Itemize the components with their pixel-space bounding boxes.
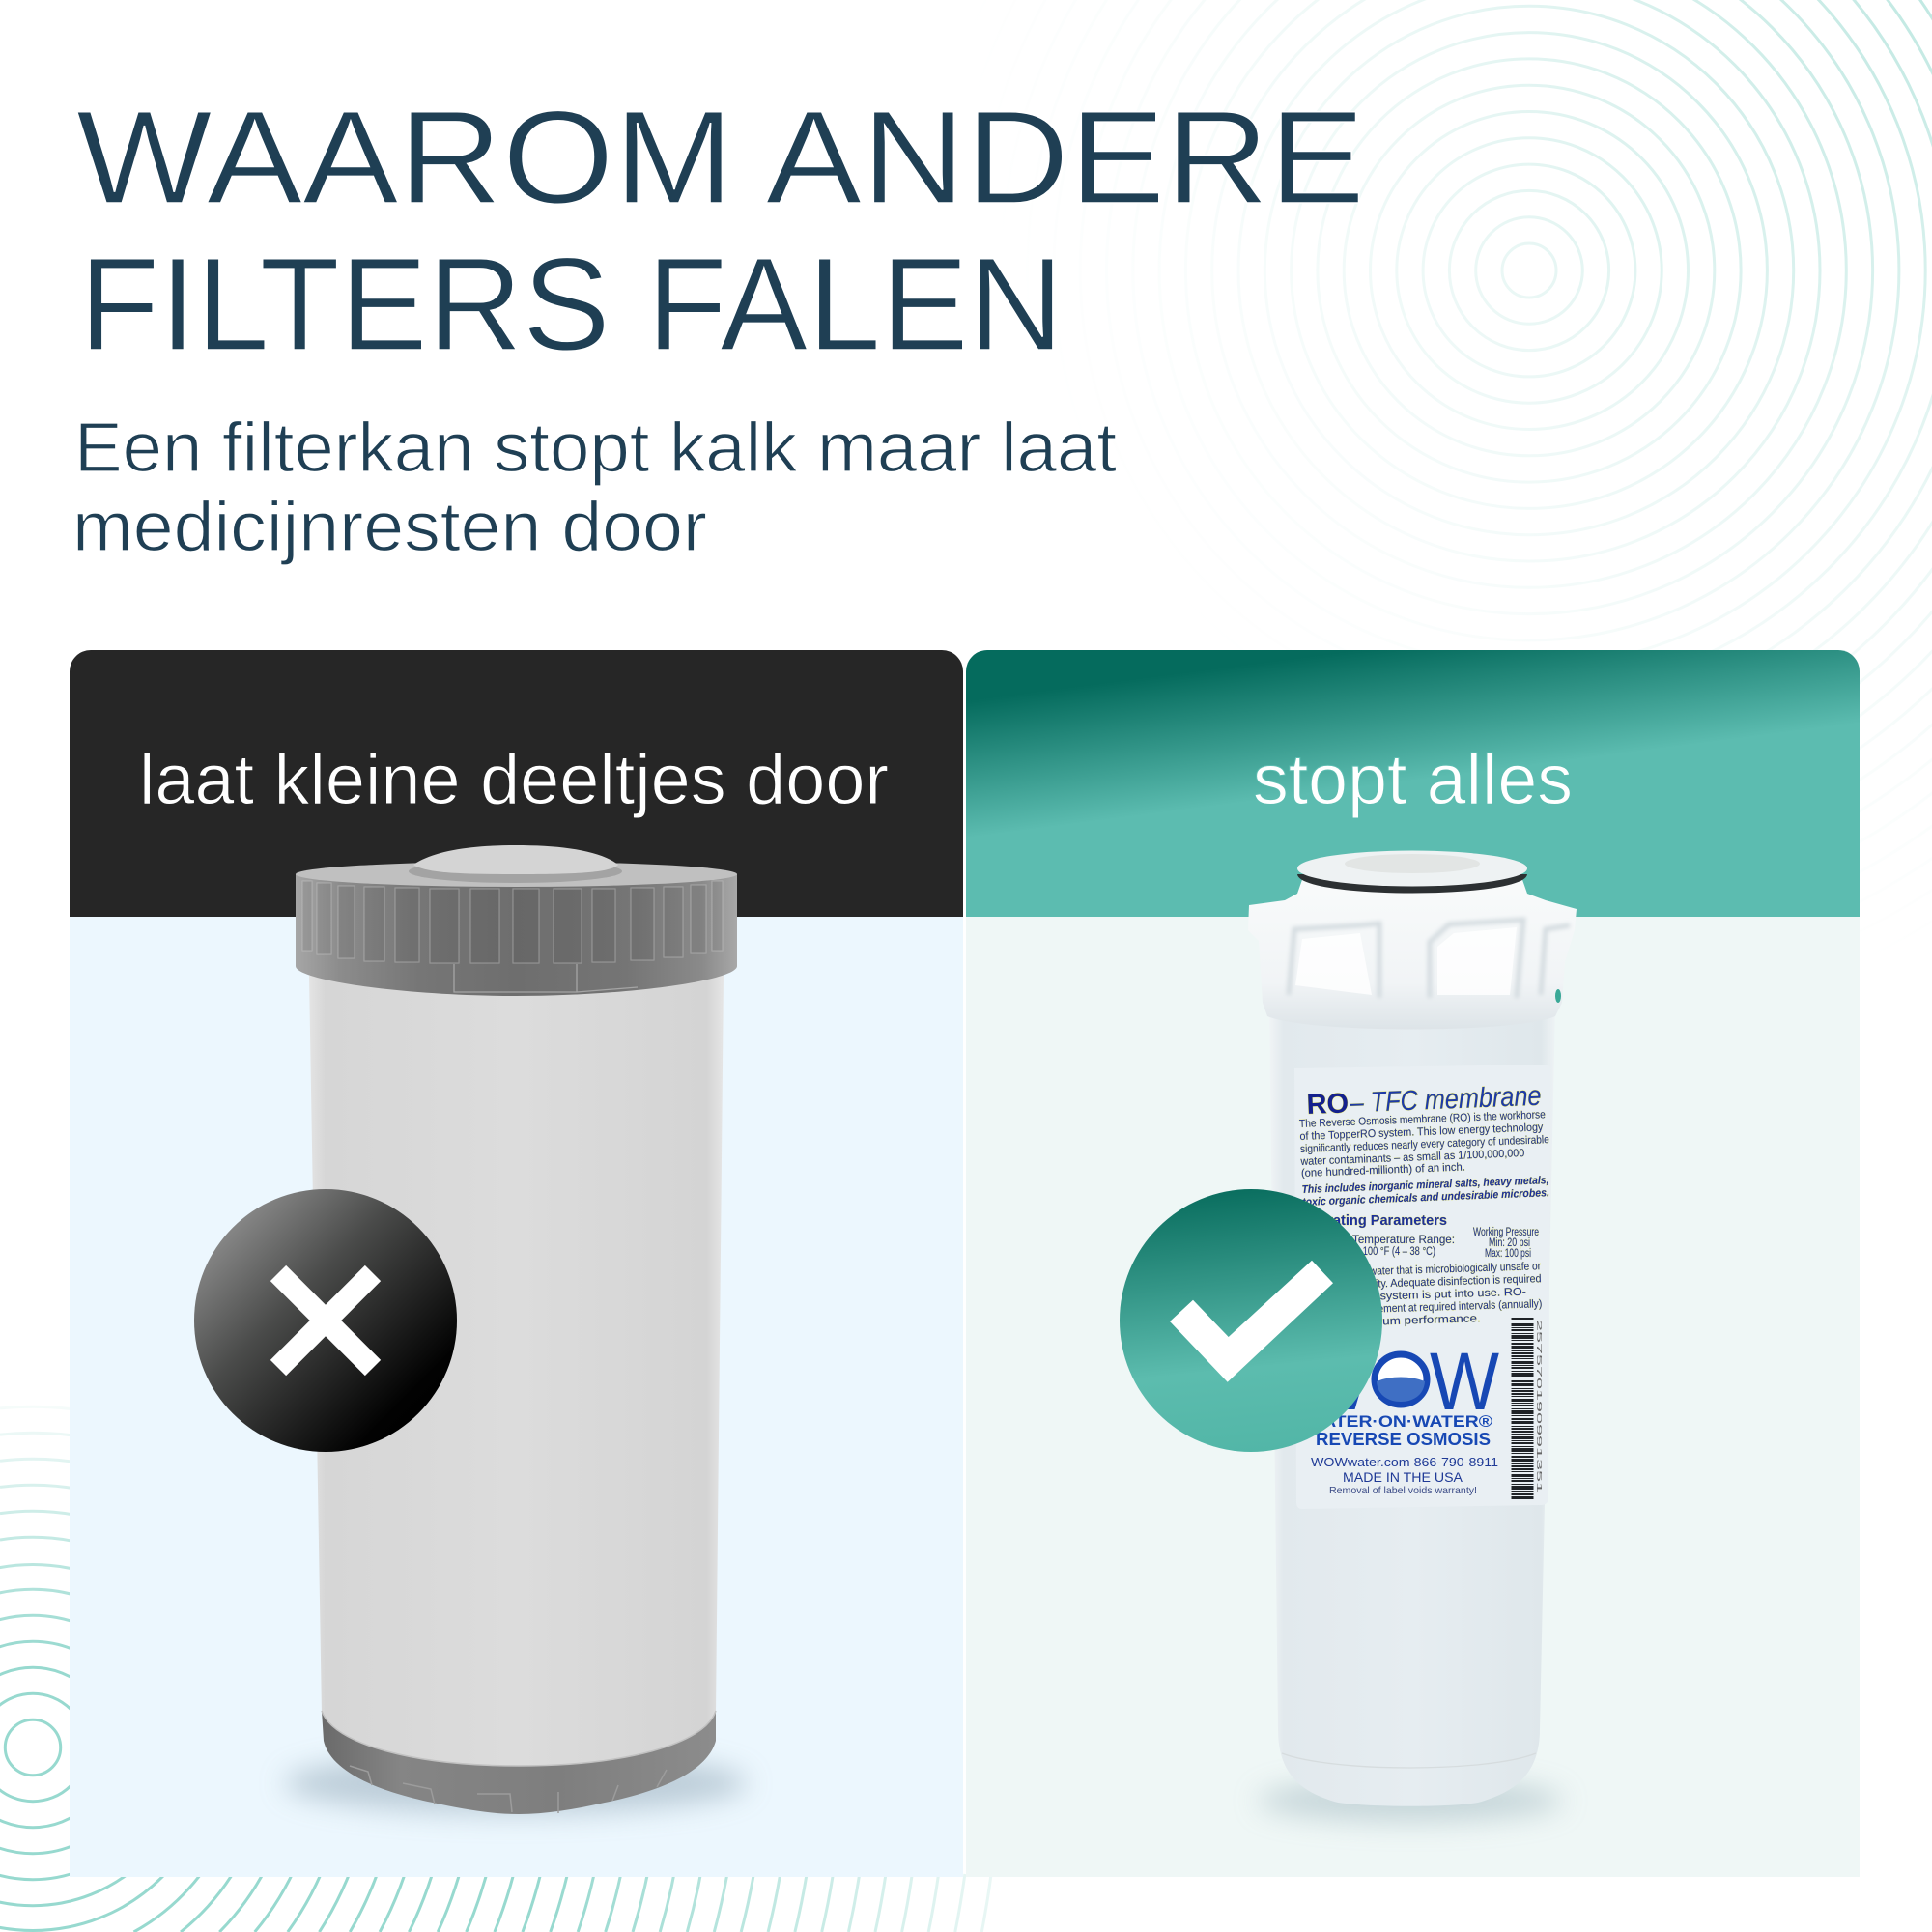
- label heading: RO: [1306, 1088, 1350, 1121]
- product label: [1294, 1065, 1551, 1509]
- left panel background: [70, 917, 963, 1877]
- title: FILTERS FALEN: [79, 231, 1064, 379]
- decorative rings: top right: [737, 0, 1932, 1063]
- label heading: – TFC membrane: [1349, 1081, 1542, 1119]
- label parameters: [1300, 1212, 1539, 1260]
- panel: right, reverse osmosis: [966, 650, 1860, 1877]
- cross badge: [194, 1189, 457, 1452]
- check badge: [1120, 1189, 1382, 1452]
- label parameters: Min: 20 psi: [1489, 1237, 1530, 1249]
- label warning: membrane replacement at required intervals (annually): [1300, 1298, 1543, 1318]
- subtitle: Een filterkan stopt kalk maar laat: [74, 410, 1117, 487]
- WOW logo: W: [1430, 1336, 1499, 1427]
- shadow under right filter: [1258, 1779, 1563, 1822]
- screw cap: [296, 845, 737, 996]
- barcode: 257570190991351: [1535, 1320, 1542, 1493]
- bayonet flange: [1248, 874, 1577, 1030]
- label parameters: 40 – 100 °F (4 – 38 °C): [1343, 1246, 1435, 1258]
- bottom foot: [322, 1711, 716, 1814]
- label description: [1298, 1109, 1551, 1208]
- label brand text: Removal of label voids warranty!: [1329, 1485, 1477, 1496]
- decorative rings: bottom left: [0, 1067, 991, 1932]
- title: [76, 84, 1365, 379]
- left header label: laat kleine deeltjes door: [139, 741, 889, 819]
- left filter cartridge: [296, 845, 737, 1814]
- label description: (one hundred-millionth) of an inch.: [1301, 1161, 1465, 1179]
- membrane cartridge: [1248, 850, 1577, 1806]
- label warning: ensures optimum performance.: [1301, 1313, 1481, 1330]
- cartridge body: [1269, 1005, 1555, 1806]
- label brand text: [1306, 1412, 1498, 1496]
- label description: of the TopperRO system. This low energy technology: [1299, 1122, 1544, 1143]
- filter body: [309, 976, 724, 1768]
- label brand text: MADE IN THE USA: [1343, 1470, 1463, 1485]
- label description: toxic organic chemicals and undesirable microbes.: [1302, 1187, 1549, 1208]
- subtitle: [72, 410, 1117, 566]
- label warning: [1299, 1261, 1543, 1330]
- label warning: Do not use with water that is microbiologically unsafe or: [1299, 1261, 1541, 1280]
- sealing ring and top disc: [1297, 850, 1527, 893]
- label description: water contaminants – as small as 1/100,000,000: [1299, 1148, 1525, 1168]
- label description: The Reverse Osmosis membrane (RO) is the workhorse: [1299, 1109, 1546, 1130]
- label brand text: WATER·ON·WATER®: [1306, 1412, 1493, 1431]
- subtitle: medicijnresten door: [72, 489, 707, 566]
- left panel header: [70, 650, 963, 917]
- label parameters: Working Pressure: [1473, 1227, 1539, 1238]
- label parameters: Operating Parameters: [1300, 1212, 1447, 1229]
- label warning: of unknown quality. Adequate disinfection is required: [1299, 1273, 1542, 1293]
- WOW logo: [1294, 1336, 1499, 1427]
- title: WAAROM ANDERE: [76, 84, 1365, 232]
- label heading: [1306, 1081, 1542, 1121]
- label warning: before the RO system is put into use. RO-: [1300, 1287, 1526, 1305]
- right header label: stopt alles: [1253, 741, 1573, 819]
- right panel background: [966, 917, 1860, 1877]
- label parameters: Max: 100 psi: [1485, 1248, 1531, 1260]
- shadow under left filter: [284, 1752, 748, 1814]
- right panel header: [966, 650, 1860, 917]
- panel: left, other filters: [70, 650, 963, 1877]
- label brand text: WOWwater.com 866-790-8911: [1311, 1455, 1498, 1469]
- label brand text: REVERSE OSMOSIS: [1316, 1430, 1491, 1449]
- label description: significantly reduces nearly every category of undesirable: [1300, 1134, 1549, 1155]
- label parameters: Temperature Range:: [1352, 1235, 1455, 1246]
- label description: This includes inorganic mineral salts, heavy metals,: [1301, 1175, 1549, 1196]
- WOW logo: W: [1294, 1336, 1372, 1427]
